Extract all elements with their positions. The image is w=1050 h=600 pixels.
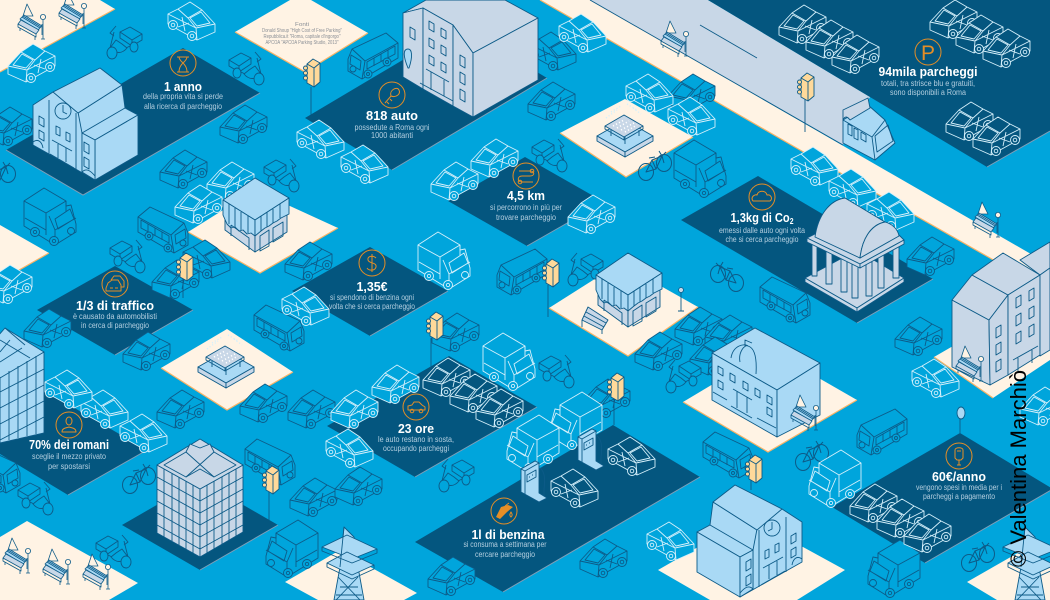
bottom cars with blue fill: [428, 557, 475, 596]
icon: dollar: [359, 250, 385, 276]
panel: cream square shop left: [188, 190, 338, 273]
stat: 1/3 di traffico: è causato da automobilisti: [73, 312, 157, 321]
panel: cream square palace: [683, 350, 857, 452]
stat: 94mila parcheggi: sono disponibili a Roma: [890, 88, 966, 97]
stat: 1/3 di traffico: [73, 271, 157, 330]
panel: dark plate 70% romani: [0, 388, 147, 495]
building: fountain left: [198, 335, 254, 388]
stat: 1l di benzina: 1l di benzina: [472, 527, 545, 542]
icon: bench by the palace: [791, 395, 819, 431]
panel: dark plate 1,3kg: [681, 176, 933, 323]
icon: fuel pump one: [521, 461, 547, 502]
watermark: copyright: © Valentina Marchiò: [1006, 370, 1031, 567]
panel: dark plate 60 euro: [832, 433, 1050, 563]
stat: 70% dei romani: [29, 412, 109, 471]
stat: 818 auto: 1000 abitanti: [371, 131, 413, 140]
stat: 70% dei romani: 70% dei romani: [29, 437, 109, 452]
icon: pylon left: [322, 527, 377, 600]
panel: cream square fountain left: [161, 329, 293, 410]
panel: dark plate 1,35 euro: [292, 247, 448, 336]
panel: sources cream square: [235, 0, 368, 72]
scooters: [18, 26, 701, 568]
stat: 1 anno: [143, 50, 223, 111]
stat: 4,5 km: 4,5 km: [507, 188, 545, 203]
stat: 23 ore: occupando parcheggi: [383, 444, 449, 453]
stat: 1,3kg di Co2: che si cerca parcheggio: [726, 235, 799, 244]
bicycles: [0, 151, 994, 572]
building: camper at road end: [843, 98, 895, 160]
icon: cloud: [749, 184, 775, 210]
panel: dark plate 818 auto: [305, 26, 547, 170]
panel: dark plate 23 ore: [327, 356, 537, 477]
panel: cream square fountain top: [560, 99, 693, 177]
panel: dark plate 1 anno: [6, 48, 260, 195]
stat: 1,35 euro: [329, 250, 415, 311]
panel: dark plate 1/3 traffico: [37, 266, 193, 355]
stat: 1/3 di traffico: in cerca di parcheggio: [81, 321, 149, 330]
stat: 60 euro/anno: [916, 443, 1002, 501]
icon: small parking meter by shop: [678, 288, 684, 311]
stat: 23 ore: 23 ore: [398, 421, 434, 436]
panel: cream square pylon right: [967, 550, 1050, 600]
dark outlined trucks: [24, 140, 920, 598]
callout: sources: Repubblica.it "Roma, capitale d'ingorgo": [264, 34, 341, 40]
stat: 4,5 km: [490, 163, 562, 222]
stat: 23 ore: le auto restano in sosta,: [378, 435, 454, 444]
panel: cream square shop right: [549, 263, 698, 356]
stat: 94mila parcheggi: 94mila parcheggi: [878, 64, 978, 79]
dark outlined buses: [0, 33, 907, 493]
stat: 1,3kg di Co2: 1,3kg di Co: [730, 210, 800, 225]
stat: 70% dei romani: per spostarsi: [48, 462, 90, 471]
building: tower left: [0, 328, 44, 443]
panel: cream square top left: [0, 0, 115, 72]
stat: 23 ore: [378, 394, 454, 453]
stat: 1,35 euro: 1,35€: [356, 279, 388, 294]
white outlined trucks: [418, 232, 861, 508]
stat: 70% dei romani: sceglie il mezzo privato: [32, 452, 106, 461]
icon: parking meter: [946, 443, 972, 469]
stat: 1 anno: alla ricerca di parcheggio: [144, 102, 222, 111]
icon: route: [513, 163, 539, 189]
stat: 1 anno: della propria vita si perde: [143, 92, 223, 101]
stat: 818 auto: [354, 82, 430, 140]
stat: 94mila parcheggi: totali, tra strisce blu e gratuiti,: [881, 79, 975, 88]
callout: sources: Donald Shoup "High Cost of Free Parking": [262, 28, 342, 34]
building: tower centre: [157, 439, 243, 557]
panel: dark plate tower: [122, 480, 278, 570]
panel: road with sidewalk: [540, 0, 1050, 295]
icon: key: [379, 82, 405, 108]
building: church: [697, 485, 802, 597]
icon: bench by shop: [582, 307, 608, 334]
building: fountain top: [597, 104, 653, 157]
stat: 818 auto: 818 auto: [366, 108, 418, 123]
stat: 60 euro/anno: 60€/anno: [932, 469, 986, 484]
icon: traffic cars: [102, 271, 128, 297]
stat: 1,3kg di Co2: [719, 184, 805, 244]
stat: 60 euro/anno: vengono spesi in media per i: [916, 483, 1002, 492]
panel: cream square church: [658, 520, 845, 600]
callout: sources: [262, 22, 342, 46]
icon: person: [56, 412, 82, 438]
icon: bench by the right apartment: [956, 346, 984, 382]
building: domed monument: [805, 198, 904, 312]
panel: dark plate 1l benzina: [415, 425, 700, 592]
white outlined cars on dark plates: [423, 0, 1030, 552]
icon: pylon right: [1003, 527, 1050, 600]
panel: dark plate 94mila parcheggi: [708, 0, 1050, 167]
stat: 4,5 km: trovare parcheggio: [496, 213, 556, 222]
building: right apartment: [952, 242, 1050, 385]
panel: cream square right apartment: [934, 290, 1050, 398]
icon: parking P: P: [921, 42, 935, 65]
panel: dark plate 4,5 km: [448, 157, 604, 246]
panel: cream square edge left: [0, 225, 49, 281]
stat: 60 euro/anno: parcheggi a pagamento: [923, 492, 995, 501]
stat: 1,3kg di Co2: 2: [790, 217, 794, 226]
panel: cream square benches bottom left: [0, 521, 138, 600]
building: town hall: [33, 68, 138, 180]
stat: 1,35 euro: si spendono di benzina ogni: [330, 293, 414, 302]
stat: 1,35 euro: volta che si cerca parcheggio: [329, 302, 415, 311]
callout: sources: APCOA "APCOA Parking Studio, 2013": [266, 40, 339, 46]
stat: 1l di benzina: cercare parcheggio: [475, 550, 535, 559]
building: palace: [712, 328, 820, 437]
stat: 1l di benzina: [464, 498, 547, 559]
stat: 818 auto: possedute a Roma ogni: [354, 123, 430, 132]
panel: cream square pylon: [285, 550, 417, 600]
stat: 1l di benzina: si consuma a settimana per: [464, 540, 547, 549]
building: shop left: [223, 178, 289, 252]
stat: 4,5 km: si percorrono in più per: [490, 203, 562, 212]
stat: 1/3 di traffico: 1/3 di traffico: [76, 298, 154, 313]
icon: fuel pump two: [578, 429, 604, 470]
icon: traffic lights: [176, 59, 814, 520]
icon: hourglass: [170, 50, 196, 76]
building: shop right: [596, 253, 662, 327]
icon: car: [403, 394, 429, 420]
callout: sources: Fonti: [295, 22, 309, 28]
stat: 94mila parcheggi: [878, 39, 978, 97]
building: apartment top: [403, 0, 538, 117]
icon: parking meter on plate: [957, 407, 965, 433]
icon: fuel nozzle: [491, 498, 517, 524]
stat: 1 anno: 1 anno: [164, 79, 202, 94]
stat: 1,3kg di Co2: emessi dalle auto ogni volta: [719, 226, 805, 235]
